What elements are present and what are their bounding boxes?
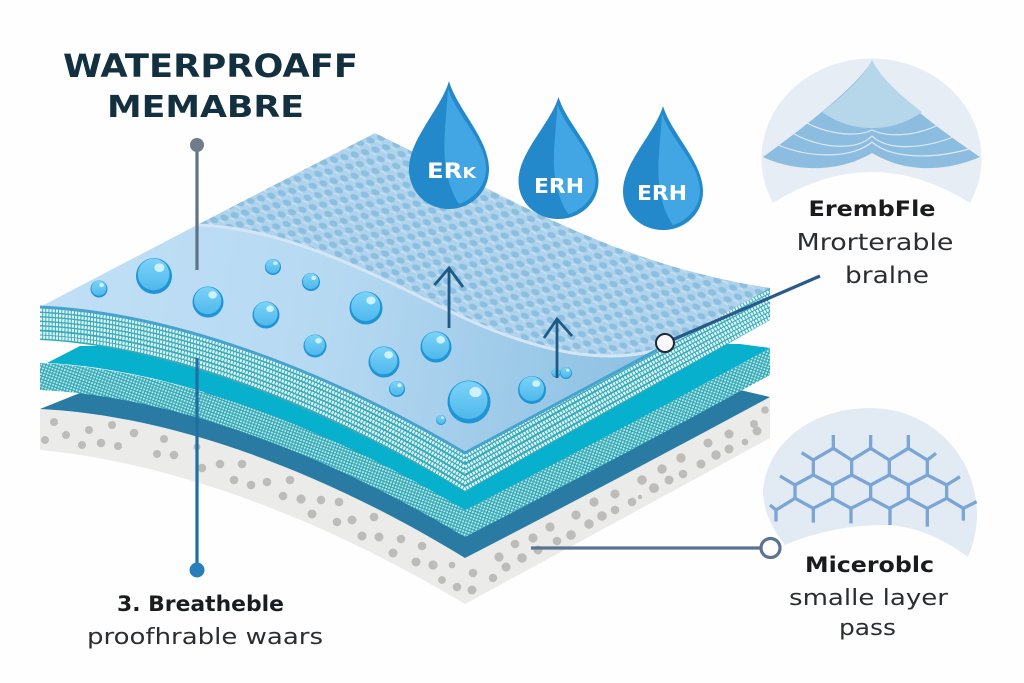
layer: textured outer surface [197, 133, 770, 400]
panel: upper detail label: Mrorterable [796, 230, 954, 256]
water drop 2: ERH [534, 174, 584, 198]
callout: pointer to upper detail [656, 276, 820, 352]
layer: teal mesh side [40, 348, 770, 537]
layer: dark blue sheet [40, 390, 770, 558]
icon: hexagon lattice [770, 435, 977, 527]
callout: breathable label [87, 592, 323, 650]
panel: lower detail label [789, 553, 949, 641]
panel: microporous detail circle [763, 408, 977, 557]
layer: striped fabric [40, 288, 770, 492]
callout: pointer to lower detail [531, 538, 780, 558]
water drop 3 [623, 106, 703, 230]
panel: upper detail label: bralne [845, 263, 929, 289]
layer: gray porous base [40, 397, 770, 604]
water drop 1: ER K [427, 159, 478, 183]
water drop 3: ERH [637, 181, 687, 205]
panel: upper detail label [796, 197, 954, 289]
panel: lower detail label: smalle layer [789, 586, 949, 611]
title: MEMABRE [107, 90, 304, 125]
panel: lower detail label: Miceroblc [805, 553, 934, 577]
layer: smooth membrane surface [40, 225, 657, 453]
layer: teal top face [47, 344, 770, 510]
panel: upper detail label: ErembFle [808, 197, 936, 221]
callout line: breathable pointer [190, 358, 204, 578]
callout line: top membrane pointer [190, 138, 204, 270]
icon: folded membrane [763, 60, 980, 168]
water beads [90, 258, 572, 425]
water drop 1 [409, 81, 489, 209]
arrow: vapor rising left [434, 268, 463, 328]
gray pores [41, 406, 769, 594]
water drop 2 [518, 97, 598, 219]
callout: breathable label: 3. Breatheble [117, 592, 284, 616]
title [63, 47, 358, 125]
callout: breathable label: proofhrable waars [87, 625, 323, 650]
arrow: vapor rising right [544, 319, 572, 378]
panel: membrane detail circle [762, 58, 982, 203]
panel: lower detail label: pass [839, 616, 896, 641]
title: WATERPROAFF [63, 47, 358, 85]
